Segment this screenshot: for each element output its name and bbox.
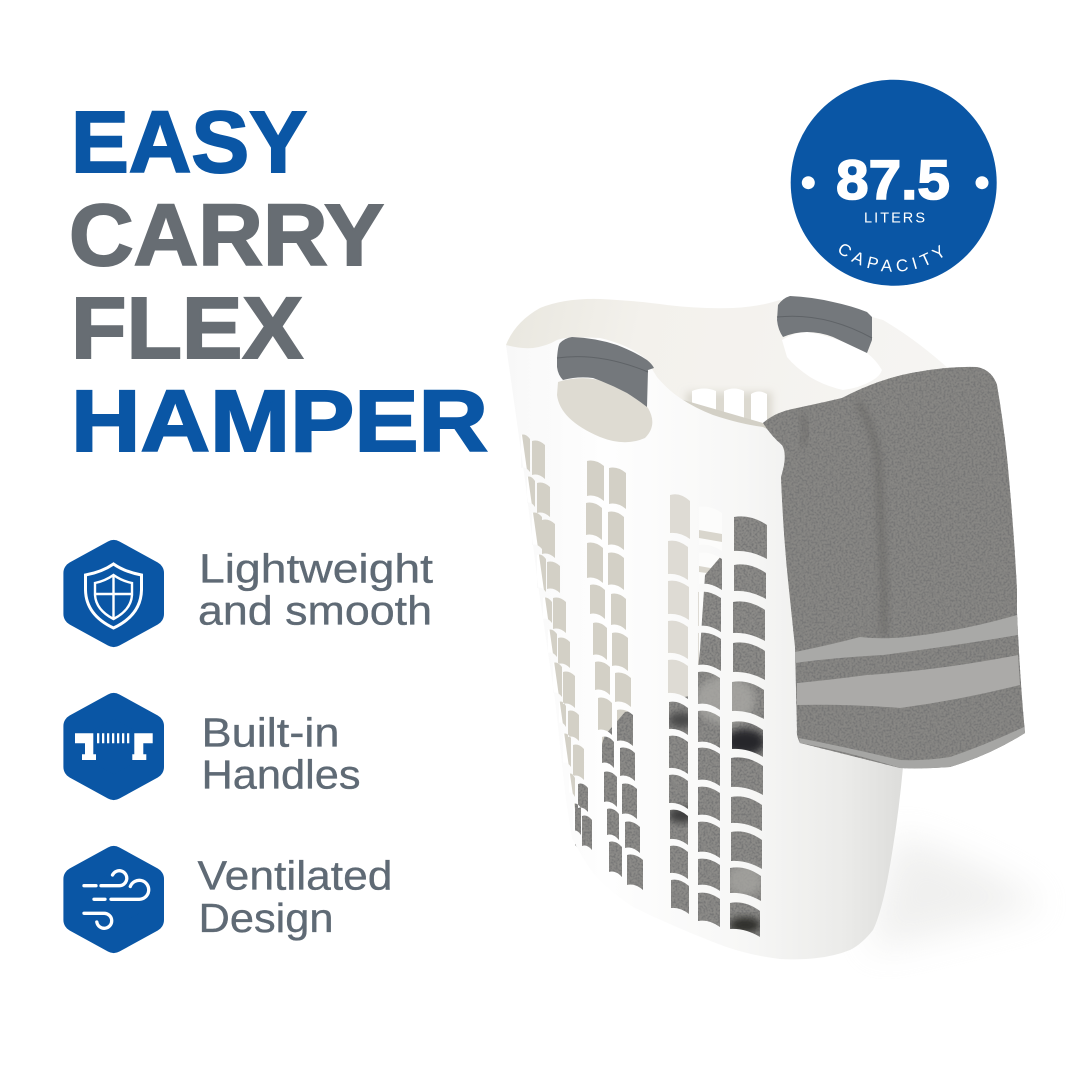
feature text: and smooth	[198, 588, 432, 634]
hanging towel	[763, 367, 1025, 768]
title: FLEX	[71, 280, 303, 377]
feature text	[198, 546, 434, 634]
title	[69, 94, 488, 470]
towel light bands	[795, 615, 1018, 663]
hamper front wall with vents	[506, 337, 905, 959]
feature text: Built-in	[202, 710, 340, 756]
title: EASY	[71, 94, 307, 191]
icon: wind hexagon	[75, 858, 152, 941]
left handle opening	[557, 378, 652, 442]
capacity badge: LITERS	[864, 210, 925, 226]
feature text	[202, 710, 360, 798]
icon: handle hexagon	[75, 705, 153, 788]
feature: ventilated design	[75, 852, 393, 941]
title: CARRY	[69, 187, 384, 284]
feature: built-in handles	[75, 705, 360, 798]
floor shadow	[870, 835, 1045, 950]
hamper back rim and inner wall	[506, 299, 950, 945]
feature text: Design	[198, 895, 334, 941]
title: HAMPER	[71, 373, 488, 470]
left grey grip	[557, 337, 654, 407]
inner wall seen through vents	[510, 350, 770, 945]
capacity badge: CAPACITY	[839, 244, 943, 272]
back wall vent slots	[692, 388, 767, 424]
feature text	[198, 852, 392, 941]
feature text: Lightweight	[199, 546, 434, 592]
product: laundry hamper with towel	[506, 296, 1045, 959]
right handle opening	[782, 332, 882, 390]
icon: shield hexagon	[75, 552, 152, 635]
feature: lightweight and smooth	[75, 546, 434, 635]
laundry inside hamper	[575, 516, 767, 937]
right grey grip	[777, 296, 872, 353]
feature text: Handles	[202, 752, 360, 798]
feature text: Ventilated	[198, 852, 392, 898]
capacity badge	[790, 80, 997, 286]
towel fold shadows	[858, 402, 884, 635]
capacity badge: 87.5	[836, 148, 950, 211]
